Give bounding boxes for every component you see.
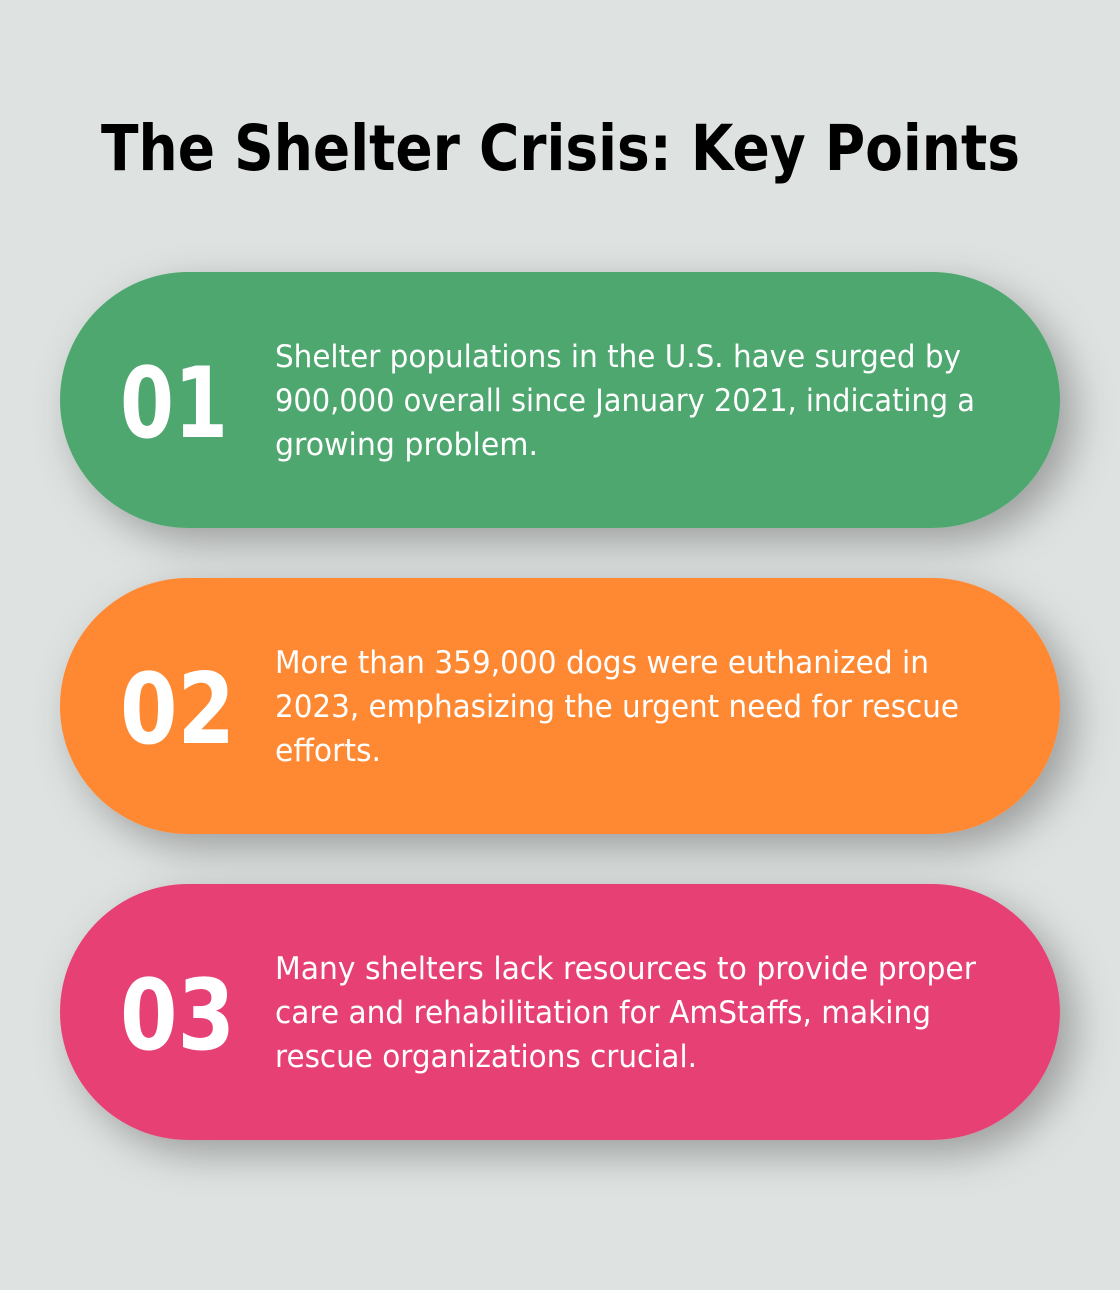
text: point 01 [275, 339, 975, 463]
text: point 01: 900,000 overall since January 2021, indicating a [275, 383, 975, 419]
number 03: 03 [120, 959, 235, 1073]
green pill [60, 272, 1060, 528]
text: point 01: Shelter populations in the U.S. have surged by [275, 339, 961, 375]
number 01: 01 [120, 347, 228, 461]
pink pill [60, 884, 1060, 1140]
text: point 03 [275, 951, 976, 1075]
number 02: 02 [120, 653, 235, 767]
text: point 01: growing problem. [275, 427, 538, 463]
text: point 03: Many shelters lack resources to provide proper [275, 951, 976, 987]
text: point 03: rescue organizations crucial. [275, 1039, 697, 1075]
orange pill [60, 578, 1060, 834]
text: point 02: efforts. [275, 733, 381, 769]
panel: point 01 [60, 272, 1060, 528]
text: point 03: care and rehabilitation for AmStaffs, making [275, 995, 931, 1031]
panel: point 02 [60, 578, 1060, 834]
text: point 02: 2023, emphasizing the urgent need for rescue [275, 689, 959, 725]
text: point 02 [275, 645, 959, 769]
panel: point 03 [60, 884, 1060, 1140]
text: point 02: More than 359,000 dogs were euthanized in [275, 645, 929, 681]
